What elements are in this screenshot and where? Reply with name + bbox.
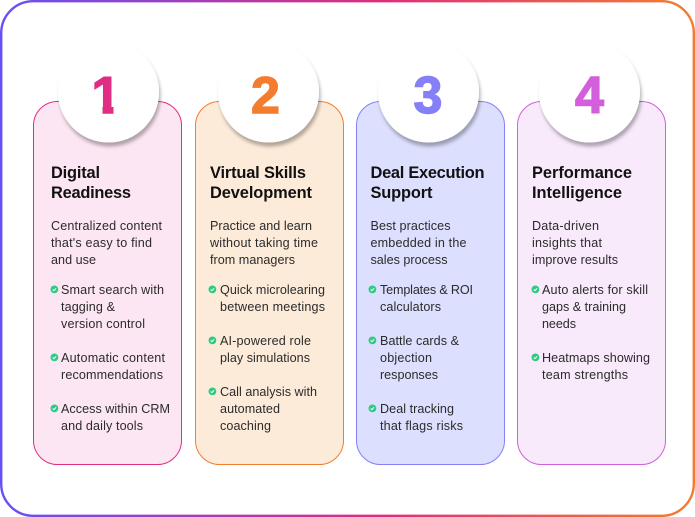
description 3: sales process bbox=[370, 253, 448, 267]
bullet list 4: Heatmaps showing bbox=[542, 351, 650, 365]
heading 4 bbox=[532, 164, 632, 202]
bullet list 1: recommendations bbox=[61, 368, 163, 382]
bullet list 1: Access within CRM bbox=[61, 402, 170, 416]
bullet list 2: AI-powered role bbox=[220, 334, 311, 348]
bullet list 1: and daily tools bbox=[61, 419, 143, 433]
description 4 bbox=[532, 219, 618, 267]
bullet list 2: Call analysis with bbox=[220, 385, 317, 399]
number badge 4: 4 bbox=[575, 67, 604, 125]
card background 1 bbox=[34, 102, 182, 464]
description 3: embedded in the bbox=[370, 236, 466, 250]
card background 2 bbox=[196, 102, 344, 464]
heading 2: Virtual Skills bbox=[210, 164, 306, 182]
description 2 bbox=[209, 219, 318, 267]
description 2: Practice and learn bbox=[210, 219, 312, 233]
heading 1: Digital bbox=[51, 164, 100, 182]
bullet list 2 bbox=[208, 283, 325, 433]
number badge 2 bbox=[218, 42, 319, 142]
number badge 3: 3 bbox=[414, 67, 442, 125]
number badge 2: 2 bbox=[251, 67, 280, 125]
bullet list 3 bbox=[368, 283, 473, 433]
bullet list 2: play simulations bbox=[220, 351, 310, 365]
bullet list 3: that flags risks bbox=[380, 419, 463, 433]
bullet list 3: calculators bbox=[380, 300, 441, 314]
heading 4: Performance bbox=[532, 164, 632, 182]
number badge 1: 1 bbox=[92, 67, 120, 125]
description 2: without taking time bbox=[209, 236, 318, 250]
panel: performance intelligence bbox=[518, 42, 666, 464]
panel: deal execution support bbox=[356, 42, 504, 464]
bullet list 1: version control bbox=[61, 317, 145, 331]
bullet list 2: coaching bbox=[220, 419, 271, 433]
bullet list 2: automated bbox=[220, 402, 280, 416]
bullet list 4 bbox=[532, 283, 650, 382]
bullet list 3: Deal tracking bbox=[380, 402, 454, 416]
description 1: that's easy to find bbox=[51, 236, 152, 250]
heading 1 bbox=[51, 164, 131, 202]
heading 1: Readiness bbox=[51, 184, 131, 202]
bullet list 3: objection bbox=[380, 351, 432, 365]
heading 3: Support bbox=[370, 184, 433, 202]
bullet list 1 bbox=[50, 283, 170, 433]
description 1: and use bbox=[51, 253, 96, 267]
bullet list 3: responses bbox=[380, 368, 438, 382]
panel: virtual skills development bbox=[196, 42, 344, 464]
heading 3 bbox=[370, 164, 484, 202]
bullet list 1: Smart search with bbox=[61, 283, 164, 297]
bullet list 1: Automatic content bbox=[61, 351, 166, 365]
number badge 4 bbox=[539, 42, 640, 142]
bullet list 4: gaps & training bbox=[542, 300, 626, 314]
description 1 bbox=[51, 219, 162, 267]
card background 4 bbox=[518, 102, 666, 464]
number badge 1 bbox=[58, 42, 159, 142]
description 1: Centralized content bbox=[51, 219, 162, 233]
description 3: Best practices bbox=[370, 219, 450, 233]
heading 2: Development bbox=[210, 184, 313, 202]
description 2: from managers bbox=[210, 253, 295, 267]
heading 2 bbox=[210, 164, 313, 202]
bullet list 3: Battle cards & bbox=[380, 334, 460, 348]
bullet list 1: tagging & bbox=[61, 300, 116, 314]
number badge 3 bbox=[378, 42, 479, 142]
panel: digital readiness bbox=[34, 42, 182, 464]
bullet list 4: team strengths bbox=[542, 368, 628, 382]
heading 3: Deal Execution bbox=[370, 164, 484, 182]
card background 3 bbox=[356, 102, 504, 464]
bullet list 4: needs bbox=[542, 317, 576, 331]
description 4: Data-driven bbox=[532, 219, 599, 233]
bullet list 2: Quick microlearing bbox=[220, 283, 325, 297]
heading 4: Intelligence bbox=[532, 184, 622, 202]
bullet list 3: Templates & ROI bbox=[380, 283, 473, 297]
bullet list 2: between meetings bbox=[220, 300, 325, 314]
description 4: improve results bbox=[532, 253, 618, 267]
bullet list 4: Auto alerts for skill bbox=[542, 283, 648, 297]
description 3 bbox=[370, 219, 466, 267]
description 4: insights that bbox=[532, 236, 602, 250]
